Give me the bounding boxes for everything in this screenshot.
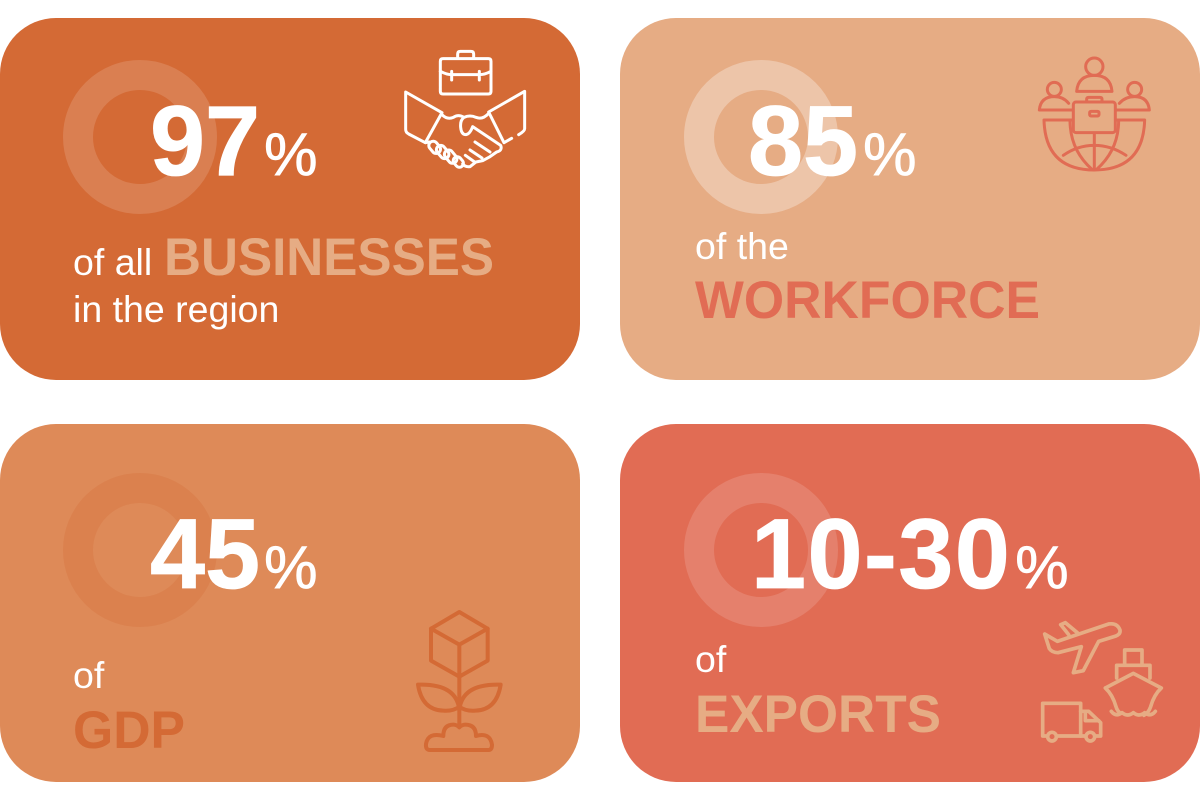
icon: handshake and briefcase bbox=[406, 51, 525, 169]
icon: cube plant bbox=[418, 612, 501, 750]
stat: 45%: 45% bbox=[150, 498, 317, 609]
icon: truck bbox=[1043, 703, 1101, 741]
icon: plane bbox=[1045, 623, 1120, 673]
ring: businesses bbox=[78, 75, 202, 199]
text: in the region: in the region bbox=[73, 288, 279, 330]
text: of: of bbox=[73, 654, 105, 696]
stat: 97%: 97% bbox=[150, 85, 317, 196]
stat: 10-30%: 10-30% bbox=[751, 498, 1069, 609]
text: businesses: BUSINESSES bbox=[164, 228, 494, 287]
panel: gdp bbox=[0, 424, 580, 782]
ring: workforce bbox=[699, 75, 823, 199]
text: of: of bbox=[695, 638, 727, 680]
panel: exports bbox=[620, 424, 1200, 782]
text: exports: EXPORTS bbox=[695, 685, 941, 744]
stat: 85%: 85% bbox=[748, 85, 916, 196]
text: gdp: GDP bbox=[73, 701, 185, 760]
panel: workforce bbox=[620, 18, 1200, 380]
icon: plane, ship and truck bbox=[1043, 623, 1161, 741]
text: workforce: WORKFORCE bbox=[695, 271, 1040, 330]
ring: gdp bbox=[78, 488, 202, 612]
ring: exports bbox=[699, 488, 823, 612]
text: of the: of the bbox=[695, 225, 789, 267]
panel: businesses bbox=[0, 18, 580, 380]
icon: people and globe bbox=[1039, 58, 1149, 170]
text: of all: of all bbox=[73, 241, 152, 283]
icon: ship bbox=[1105, 650, 1161, 715]
